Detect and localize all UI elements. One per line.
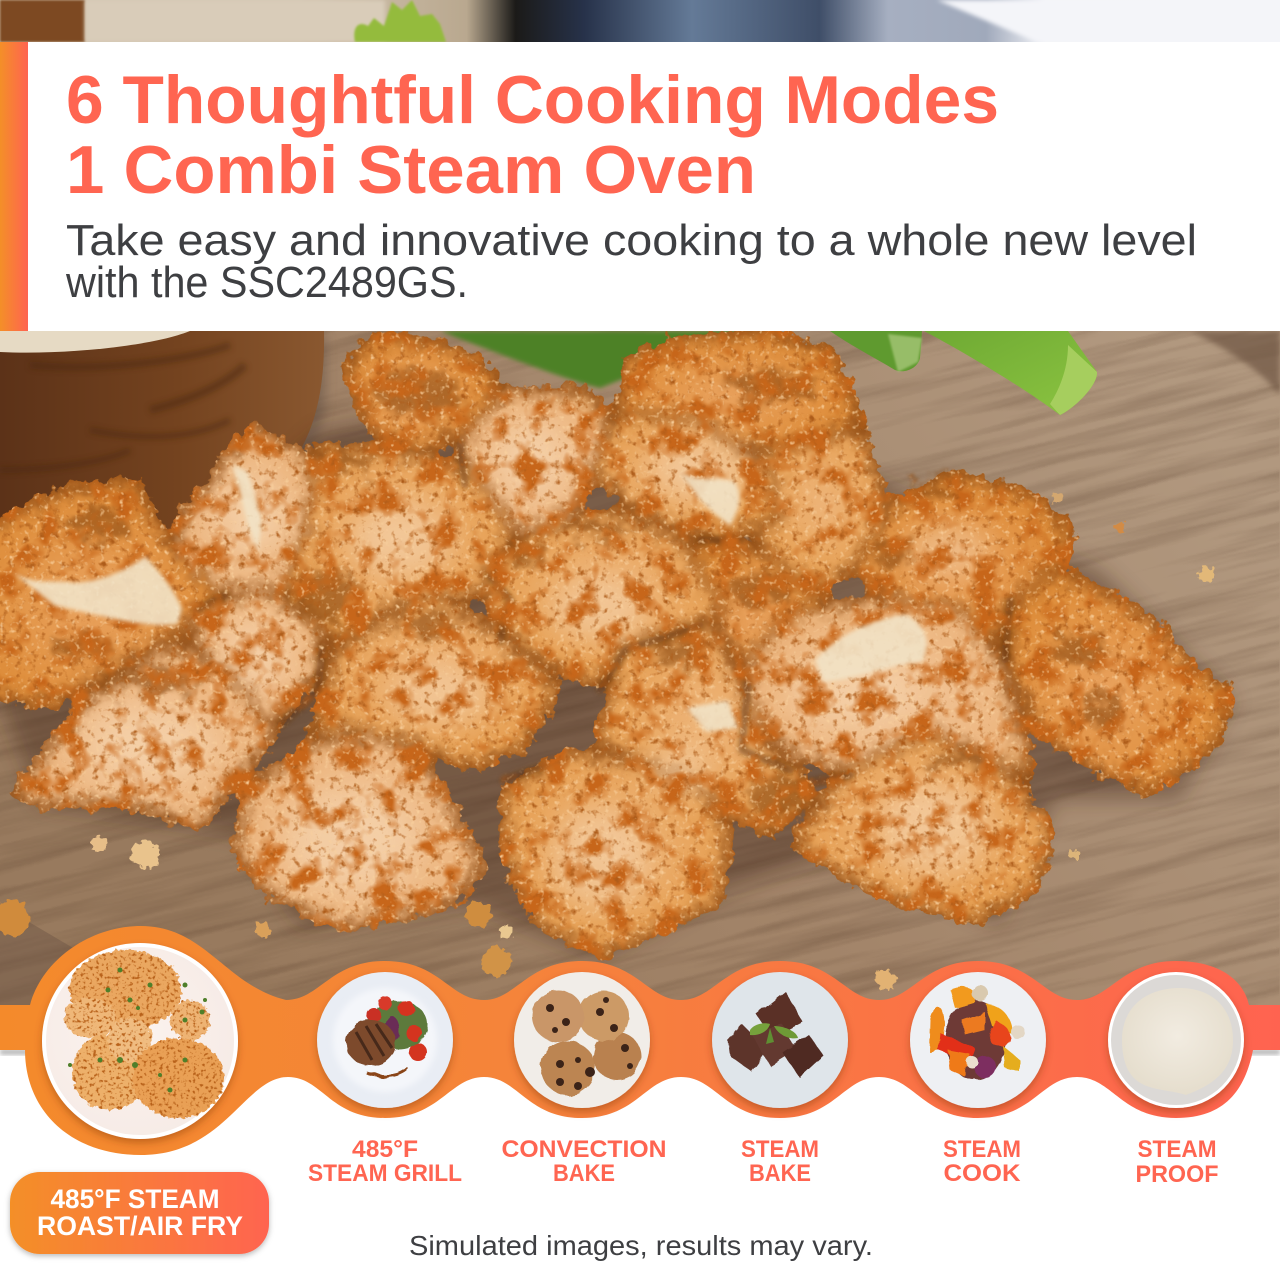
label: convection bake [502, 1136, 666, 1187]
title: 1 Combi Steam Oven [66, 132, 756, 208]
band edge shadows [0, 1049, 1280, 1055]
title [66, 62, 999, 208]
plate: convection bake cookies [514, 972, 650, 1108]
label: 485°F steam grill [308, 1136, 462, 1187]
label: steam bake: BAKE [749, 1160, 811, 1187]
white lower area [0, 1050, 1280, 1280]
dark crust patches [54, 369, 1127, 817]
footnote: Simulated images, results may vary. [409, 1230, 873, 1261]
label: steam cook: COOK [944, 1160, 1021, 1187]
merged breaded mass [0, 332, 1230, 954]
pill: 485°F steam roast / air fry [10, 1172, 269, 1254]
pale crumb highlights [85, 419, 990, 910]
subtitle: with the SSC2489GS. [65, 258, 468, 307]
front row [502, 752, 728, 954]
plate: steam grill [317, 972, 453, 1108]
orange mode ribbon [0, 926, 1280, 1155]
plate: steam cook vegetables [910, 972, 1046, 1108]
label: steam proof: STEAM [1138, 1136, 1216, 1163]
label: convection bake: CONVECTION [502, 1136, 666, 1163]
label: convection bake: BAKE [553, 1160, 615, 1187]
dark crevices between pieces [196, 445, 1010, 785]
label: 485°F steam grill: 485°F [352, 1136, 418, 1163]
label: steam bake: STEAM [741, 1136, 819, 1163]
label: steam proof: PROOF [1136, 1161, 1218, 1188]
bowl: steam proof dough [1108, 972, 1244, 1108]
small crumbs [0, 492, 1215, 990]
label: steam bake [741, 1136, 819, 1187]
photo: wooden board with breaded cauliflower [0, 331, 1280, 1061]
celery sticks [440, 331, 1097, 415]
label: steam proof [1136, 1136, 1218, 1188]
header panel [0, 42, 1280, 331]
middle row [746, 598, 1034, 778]
plate: steam bake brownies [712, 972, 848, 1108]
food pieces [0, 332, 1230, 954]
label: steam cook [943, 1136, 1021, 1187]
pill: 485°F steam roast / air fry: ROAST/AIR FRY [37, 1211, 243, 1241]
title: 6 Thoughtful Cooking Modes [66, 62, 999, 138]
subtitle [65, 216, 1197, 307]
background photo: top strip [0, 0, 1280, 42]
back row [345, 334, 498, 452]
soft contact shadow under food [0, 400, 1235, 960]
gradient side bar [0, 42, 28, 331]
label: 485°F steam grill: STEAM GRILL [308, 1160, 462, 1187]
subtitle: Take easy and innovative cooking to a whole new level [66, 216, 1197, 265]
pill: 485°F steam roast / air fry: 485°F STEAM [50, 1184, 220, 1214]
wood board [0, 331, 1280, 1061]
label: steam cook: STEAM [943, 1136, 1021, 1163]
plate: steam roast / air fry cauliflower [42, 943, 238, 1139]
wooden bowl [0, 331, 325, 583]
exposed cauliflower [12, 464, 927, 732]
